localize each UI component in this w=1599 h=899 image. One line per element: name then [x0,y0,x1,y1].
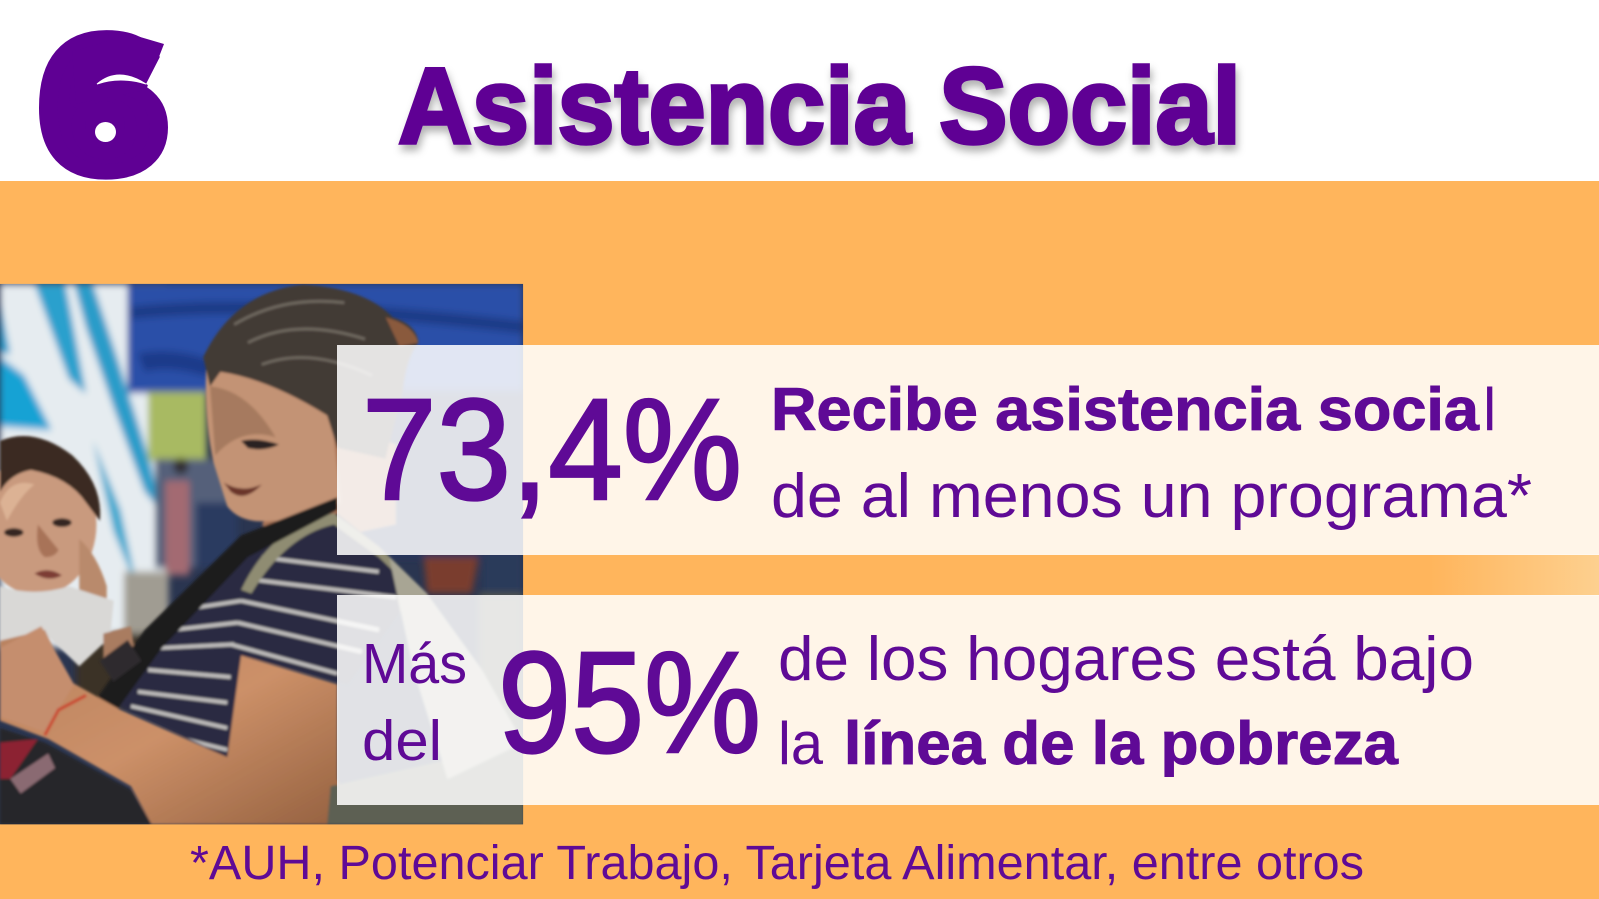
text: más del: Más [362,632,467,696]
text: recibe asistencia social: de al menos un programa* [771,462,1532,531]
camo sling [327,743,523,824]
text: línea de la pobreza: de los hogares está bajo [778,625,1474,694]
bag [0,728,152,824]
text: más del: del [362,709,442,773]
text: línea de la pobreza: la [778,710,824,777]
footnote: *AUH, Potenciar Trabajo, Tarjeta Alimentar, entre otros [190,837,1364,890]
black strap [96,497,338,710]
shirt [121,514,413,757]
text: más del [362,632,467,773]
baby [0,454,96,595]
text: línea de la pobreza: línea de la pobreza [844,710,1399,777]
panel: pobreza [337,595,1599,805]
orange background band [0,181,1599,899]
stat: 95%: 95% [498,622,761,783]
white header background [0,0,1599,182]
title: Asistencia Social [398,45,1241,166]
arm [0,630,351,824]
stat: 73,4%: 73,4% [362,369,742,530]
woman face [206,357,341,521]
text: recibe asistencia social [771,376,1532,531]
text: recibe asistencia social: Recibe asistencia socia [771,376,1480,443]
woman neck [260,437,396,532]
panel: asistencia social [337,345,1599,555]
strip fade between panels [1430,554,1599,596]
photo: mother holding baby [0,284,524,824]
woman hair [203,285,418,459]
text: línea de la pobreza [778,625,1474,777]
khaki strap [241,514,427,597]
text: recibe asistencia social: l [1483,376,1496,443]
section number 6: 6 [40,0,167,211]
